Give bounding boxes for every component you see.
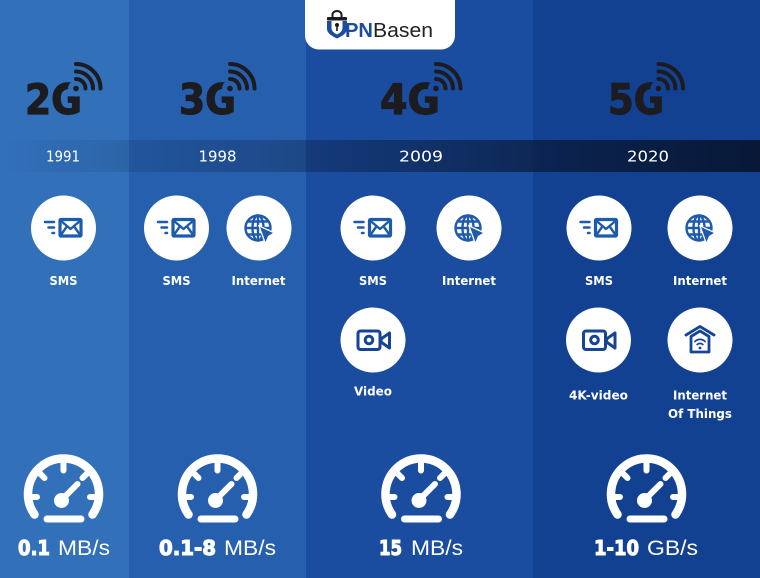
- feature: 4K-video: [566, 308, 631, 402]
- heading: 4G: [380, 64, 460, 124]
- feature: Internet: Internet: [673, 273, 727, 288]
- heading: 5G: [608, 64, 683, 124]
- panel: 2G: [0, 0, 129, 578]
- year: 2009: 2009: [399, 148, 443, 166]
- logo wordmark: PNBasen: [345, 20, 433, 42]
- year: 1998: 1998: [198, 148, 236, 166]
- feature: Internet Of Things: Internet: [673, 388, 727, 402]
- feature: Internet Of Things: Of Things: [668, 406, 732, 421]
- panel: 5G: [533, 0, 760, 578]
- speed: 0.1 MB/s: 0.1: [18, 536, 50, 560]
- feature: SMS: [340, 196, 406, 288]
- feature: SMS: [566, 196, 632, 288]
- speed gauge icon: [611, 459, 682, 519]
- feature: SMS: SMS: [50, 273, 78, 288]
- feature: Video: [340, 308, 406, 398]
- feature: SMS: SMS: [359, 273, 387, 288]
- feature: SMS: [31, 196, 96, 288]
- speed: 0.1 MB/s: [18, 536, 110, 560]
- feature: 4K-video: 4K-video: [569, 388, 628, 402]
- year: 2020: 2020: [627, 148, 669, 166]
- speed gauge icon: [28, 459, 99, 519]
- feature: Internet: Internet: [232, 273, 286, 288]
- speed: 0.1-8 MB/s: MB/s: [224, 536, 276, 560]
- speed: 0.1-8 MB/s: 0.1-8: [159, 536, 216, 560]
- speed: 15 MB/s: 15: [379, 536, 402, 560]
- feature: Internet Of Things: [668, 308, 732, 421]
- speed: 15 MB/s: [379, 536, 463, 560]
- logo: VPNBasen: [305, 0, 455, 50]
- speed: 1-10 GB/s: GB/s: [647, 536, 698, 560]
- panel: 3G: [129, 0, 306, 578]
- feature: Internet: [226, 196, 292, 288]
- feature: Internet: Internet: [442, 273, 496, 288]
- year: 1991: 1991: [46, 148, 80, 166]
- speed: 1-10 GB/s: [594, 536, 698, 560]
- speed gauge icon: [386, 459, 456, 519]
- icon: padlock shield: [327, 11, 347, 38]
- speed: 15 MB/s: MB/s: [411, 536, 463, 560]
- heading: 3G: 3G: [179, 75, 236, 124]
- panel: 4G: [306, 0, 533, 578]
- feature: SMS: SMS: [162, 273, 190, 288]
- speed: 0.1-8 MB/s: [159, 536, 276, 560]
- heading: 4G: 4G: [380, 75, 440, 124]
- feature: Video: Video: [354, 384, 392, 398]
- speed gauge icon: [182, 459, 253, 519]
- feature: Internet: [668, 196, 732, 288]
- feature: Internet: [436, 196, 502, 288]
- feature: SMS: [144, 196, 209, 288]
- speed: 1-10 GB/s: 1-10: [594, 536, 639, 560]
- heading: 2G: 2G: [25, 75, 82, 124]
- heading: 2G: [25, 64, 100, 124]
- feature: SMS: SMS: [585, 273, 613, 288]
- speed: 0.1 MB/s: MB/s: [58, 536, 110, 560]
- heading: 3G: [179, 64, 254, 124]
- heading: 5G: 5G: [608, 75, 664, 124]
